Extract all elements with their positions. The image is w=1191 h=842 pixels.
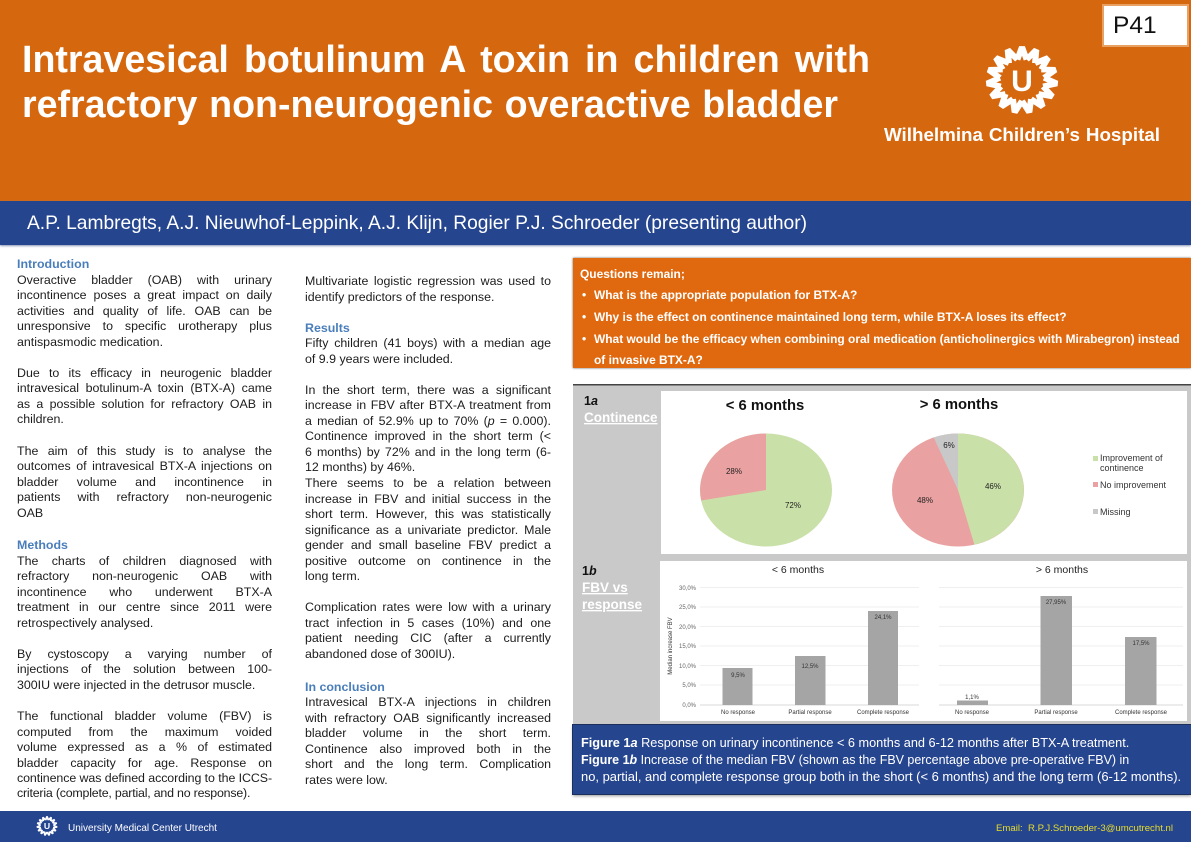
text block: results: 6 months) by 72% and in the long term (6- [305,445,551,459]
question lines: • [582,288,586,302]
text block: multivariate regression [305,274,551,304]
text block: multivariate regression: Multivariate logistic regression was used to [305,274,551,288]
label: 1b FBV vs response: 1b [582,564,597,578]
text block: methods: volume expressed as a % of estimated [17,740,272,754]
text block: conclusion: Intravesical BTX-A injections in children [305,695,551,709]
text block: conclusion: rates were low. [305,773,388,787]
title [22,38,870,125]
pie chart: under 6 months: 72% [785,501,801,510]
text block: introduction: The aim of this study is to analyse the [17,444,272,458]
caption lines: Figure 1b Increase of the median FBV (shown as the FBV percentage above pre-operative FBV) in [581,753,1129,767]
bar chart: under 6 months: 15,0% [679,644,697,650]
bar chart: over 6 months: 17,5% [1132,641,1150,647]
legend: Improvement of [1100,453,1163,463]
text block: introduction [17,257,272,520]
label: 1b FBV vs response [582,564,643,612]
title: Intravesical botulinum A toxin in children with [22,38,870,80]
text block: results: There seems to be a relation between [305,476,551,490]
text block: methods [17,538,272,800]
text block: methods: retrospectively analysed. [17,616,153,630]
text block: methods: computed from the maximum voided [17,725,272,739]
text block: results: a median of 52.9% up to 70% (p = 0.000). [305,414,551,428]
text block: conclusion [305,680,551,787]
panel: pie charts [661,391,1187,554]
text block: multivariate regression: identify predictors of the response. [305,290,494,304]
text block: results: short term. However, this was statistically [305,507,551,521]
text block: introduction: bladder volume and incontinence in [17,475,272,489]
question lines [580,267,1180,367]
legend: Missing [1100,507,1131,517]
text block: introduction: outcomes of intravesical BTX-A injections on [17,459,272,473]
text block: results: patient needing CIC (after a currently [305,631,551,645]
label: 1b FBV vs response: response [582,597,643,612]
footer band [0,811,1191,842]
pie chart: over 6 months: 48% [917,496,933,505]
text block: conclusion: bladder volume in the short term. [305,726,551,740]
text block: conclusion: Continence also improved both in the [305,742,551,756]
icon: footer logo [36,816,58,836]
text block: introduction: Introduction [17,257,89,271]
text block: results: 12 months) by 46%. [305,460,415,474]
bar chart: under 6 months: Partial response [788,710,832,716]
pie chart: over 6 months: 6% [943,441,955,450]
authors band [0,201,1191,245]
bar chart: under 6 months: 24,1% [874,615,892,621]
bar chart: under 6 months: No response [721,710,756,716]
panel: questions remain [573,258,1191,368]
label: 1a continence: Continence [584,410,658,425]
text block: introduction: activities and quality of life. OAB can be [17,304,272,318]
icon: footer logo: U [44,821,50,831]
text block: conclusion: with refractory OAB significantly increased [305,711,551,725]
header band [0,0,1191,201]
footer institution name: University Medical Center Utrecht [68,823,217,834]
bar chart: under 6 months: Complete response [857,710,910,716]
caption lines: Figure 1a Response on urinary incontinence < 6 months and 6-12 months after BTX-A treatment. [581,735,1129,750]
text block: methods: By cystoscopy a varying number of [17,647,272,661]
text block: methods: continence was defined according to the ICCS- [17,771,272,785]
text block: results: gender and small baseline FBV predict a [305,538,551,552]
text block: methods: incontinence who underwent BTX-A [17,585,272,599]
text block: results: abandoned dose of 300IU). [305,647,455,661]
text block: methods: The functional bladder volume (FBV) is [17,709,272,723]
text block: introduction: OAB [17,506,43,520]
pie chart: over 6 months [892,434,1024,546]
bar chart: over 6 months: Partial response [1034,710,1078,716]
text block: methods: Methods [17,538,68,552]
text block: results: Complication rates were low with a urinary [305,600,551,614]
legend [1093,453,1167,517]
poster number box [1102,4,1189,47]
text block: results: Continence improved in the short term (< [305,429,551,443]
text block: introduction: Due to its efficacy in neurogenic bladder [17,366,272,380]
question lines: of invasive BTX-A? [594,353,703,367]
title: refractory non-neurogenic overactive bladder [22,83,838,125]
text block: results: positive outcome on continence in the [305,554,551,568]
text block: results: of 9.9 years were included. [305,352,453,366]
text block: introduction: as a possible solution for refractory OAB in [17,397,272,411]
legend: No improvement [1100,480,1167,490]
text block: methods: criteria (complete, partial, and no response). [17,786,250,800]
icon: hospital logo [986,46,1058,114]
label: 1a continence [584,394,658,425]
question lines: • [582,332,586,346]
legend: continence [1100,463,1144,473]
bar chart: under 6 months: 10,0% [679,664,697,670]
bar chart: under 6 months: 20,0% [679,625,697,631]
bar chart: under 6 months: 12,5% [801,664,819,670]
pie heading: under 6 months: < 6 months [726,398,804,414]
text block: methods: refractory non-neurogenic OAB with [17,569,272,583]
text block: results: In the short term, there was a significant [305,383,551,397]
bar chart: over 6 months: > 6 months [1036,564,1088,576]
question lines: What is the appropriate population for BTX-A? [594,288,857,302]
hospital name: Wilhelmina Children’s Hospital [884,124,1160,145]
text block: methods: injections of the solution between 100- [17,662,272,676]
pie chart: over 6 months: 46% [985,482,1001,491]
text block: introduction: intravesical botulinum-A toxin (BTX-A) came [17,381,272,395]
icon: hospital logo: U [1011,65,1033,98]
bar chart: under 6 months: 30,0% [679,586,697,592]
label: 1b FBV vs response: FBV vs [582,580,628,595]
pie heading: over 6 months: > 6 months [920,397,998,413]
text block: results: increase in FBV and initial success in the [305,492,551,506]
bar chart: under 6 months: 9,5% [731,673,745,679]
text block: introduction: children. [17,412,64,426]
text block: results: increase in FBV after BTX-A treatment from [305,398,551,412]
question lines: What would be the efficacy when combining oral medication (anticholinergics with Mirabegron) instead [594,332,1180,346]
bar chart: over 6 months: Complete response [1115,710,1168,716]
bar chart: over 6 months: No response [955,710,990,716]
bar chart: under 6 months: < 6 months [772,564,824,576]
text block: conclusion: In conclusion [305,680,385,694]
bar chart: under 6 months: Median increase FBV [668,617,674,675]
question lines: • [582,310,586,324]
text block: results: significance as a univariate predictor. Male [305,523,551,537]
question lines: Questions remain; [580,267,685,281]
bar chart: over 6 months: 1,1% [965,695,979,701]
text block: introduction: incontinence poses a great impact on daily [17,288,272,302]
caption lines: no, partial, and complete response group both in the short (< 6 months) and the long term (6-12 months). [581,769,1181,784]
question lines: Why is the effect on continence maintained long term, while BTX-A loses its effect? [594,310,1066,324]
text block: results [305,320,551,661]
footer email: Email: R.P.J.Schroeder-3@umcutrecht.nl [996,823,1173,834]
label: 1a continence: 1a [584,394,598,408]
bar chart: under 6 months: 0,0% [682,703,697,709]
text block: introduction: Overactive bladder (OAB) with urinary [17,273,272,287]
bar chart: under 6 months: 25,0% [679,605,697,611]
bar chart: under 6 months [668,564,919,716]
pie chart: under 6 months [700,434,832,546]
poster number box: P41 [1113,12,1157,39]
text block: introduction: antispasmodic medication. [17,335,163,349]
text block: results: Fifty children (41 boys) with a median age [305,336,551,350]
panel: figure caption [573,725,1191,794]
panel: bar charts [660,561,1187,721]
bar chart: under 6 months: 5,0% [682,683,697,689]
text block: introduction: patients with refractory non-neurogenic [17,490,272,504]
text block: methods: The charts of children diagnosed with [17,554,272,568]
bar chart: over 6 months [939,564,1183,716]
text block: methods: treatment in our centre since 2011 were [17,600,272,614]
text block: conclusion: short and the long term. Complication [305,757,551,771]
text block: results: long term. [305,569,360,583]
text block: methods: 300IU were injected in the detrusor muscle. [17,678,255,692]
text block: methods: bladder capacity for age. Response on [17,756,272,770]
panel: figures [573,384,1191,724]
text block: introduction: unresponsive to specific urotherapy plus [17,319,272,333]
text block: results: tract infection in 5 cases (10%) and one [305,616,551,630]
text block: results: Results [305,320,350,334]
bar chart: over 6 months: 27,95% [1046,600,1067,606]
pie chart: under 6 months: 28% [726,467,742,476]
authors band: A.P. Lambregts, A.J. Nieuwhof-Leppink, A.J. Klijn, Rogier P.J. Schroeder (presenting author) [27,213,807,234]
